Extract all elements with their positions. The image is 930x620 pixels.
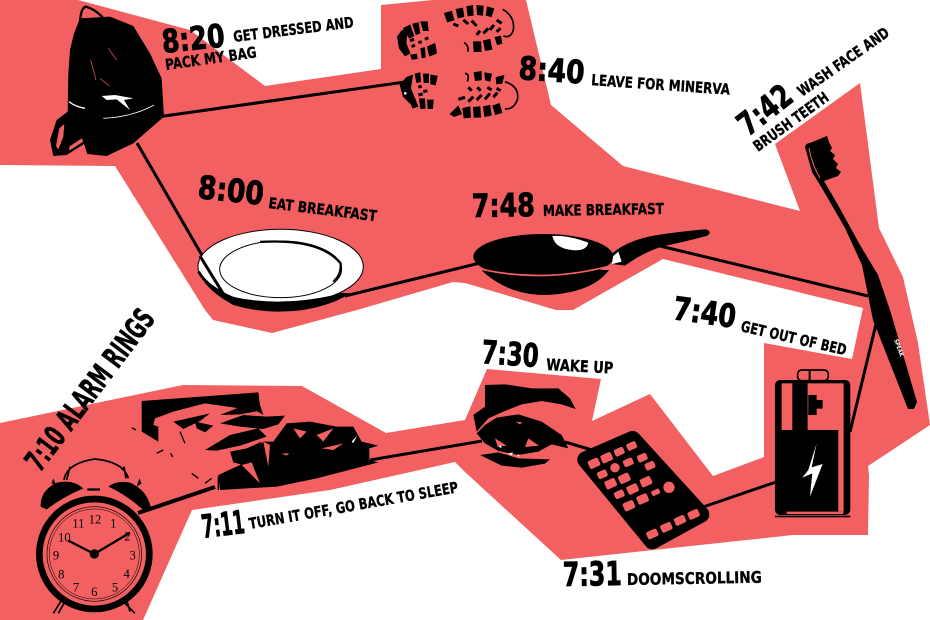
heading: 7:40 get out of bed [671, 289, 848, 359]
clock numerals [53, 512, 136, 599]
clock numerals: 3 [129, 549, 136, 563]
heading: 7:40 get out of bed: 7:40 [671, 289, 739, 336]
heading: 7:11 turn it off, go back to sleep: TURN IT OFF, GO BACK TO SLEEP [248, 478, 459, 533]
icon: dinner plate [198, 229, 363, 312]
icon: toothbrush [805, 136, 917, 409]
heading: 7:42 wash face and brush teeth: BRUSH TEETH [750, 88, 832, 155]
heading: 8:00 eat breakfast: 8:00 [196, 168, 266, 213]
clock body [39, 499, 149, 609]
app icons [587, 441, 700, 540]
heading: 8:20 get dressed and pack my bag: GET DRESSED AND [232, 13, 355, 46]
heading: 7:48 make breakfast [471, 186, 665, 225]
heading: 7:42 wash face and brush teeth [730, 24, 893, 155]
toothbrush brand mark: SPEAK [892, 338, 905, 358]
heading: 7:11 turn it off, go back to sleep [199, 478, 459, 546]
icon: backpack [50, 7, 164, 156]
icon: alarm clock [39, 459, 151, 613]
clock numerals: 6 [91, 585, 97, 599]
heading: 7:31 doomscrolling [562, 554, 762, 594]
clock numerals: 11 [72, 516, 84, 530]
heading: 8:20 get dressed and pack my bag: PACK MY BAG [164, 43, 258, 74]
heading: 7:31 doomscrolling: DOOMSCROLLING [627, 568, 762, 589]
heading: 8:00 eat breakfast [196, 168, 379, 225]
heading: 7:31 doomscrolling: 7:31 [562, 554, 622, 594]
icon: battery [775, 370, 850, 517]
clock numerals: 9 [53, 549, 59, 563]
clock numerals: 1 [110, 516, 116, 530]
clock bells and handle [41, 459, 151, 510]
heading: 8:40 leave for minerva: 8:40 [517, 49, 586, 92]
icon: frying pan [473, 229, 710, 295]
heading: 7:48 make breakfast: 7:48 [471, 186, 535, 225]
heading: 7:11 turn it off, go back to sleep: 7:11 [199, 503, 247, 546]
clock numerals: 4 [123, 567, 130, 581]
icon: unmade bed [132, 392, 378, 490]
heading: 8:00 eat breakfast: EAT BREAKFAST [268, 194, 379, 225]
icon: smartphone [586, 439, 701, 541]
clock numerals: 2 [124, 530, 130, 544]
heading: 7:42 wash face and brush teeth: 7:42 [730, 76, 800, 143]
heading: 8:20 get dressed and pack my bag: 8:20 [160, 17, 226, 61]
icon: eye [473, 384, 576, 468]
heading: 7:42 wash face and brush teeth: WASH FACE AND [794, 24, 893, 100]
bottom boot print [400, 71, 518, 118]
clock numerals: 12 [89, 512, 101, 526]
heading: 8:40 leave for minerva [517, 49, 731, 99]
top boot print [397, 5, 514, 59]
heading: 7:10 alarm rings: 7:10 ALARM RINGS [18, 303, 163, 478]
heading: 7:30 wake up: 7:30 [480, 333, 540, 375]
clock numerals: 7 [73, 580, 79, 594]
icon: boot prints [397, 5, 518, 118]
heading: 8:40 leave for minerva: LEAVE FOR MINERVA [591, 71, 731, 99]
heading: 7:30 wake up [480, 333, 614, 378]
heading: 7:30 wake up: WAKE UP [546, 355, 614, 378]
clock numerals: 10 [58, 531, 71, 545]
clock numerals: 5 [112, 580, 118, 594]
clock numerals: 8 [58, 567, 64, 581]
heading: 7:40 get out of bed: GET OUT OF BED [739, 317, 848, 359]
clock feet [53, 600, 135, 613]
heading: 8:20 get dressed and pack my bag [160, 13, 355, 74]
heading: 7:48 make breakfast: MAKE BREAKFAST [543, 200, 665, 220]
clock hands [68, 533, 130, 559]
timeline connector lines [137, 82, 877, 513]
